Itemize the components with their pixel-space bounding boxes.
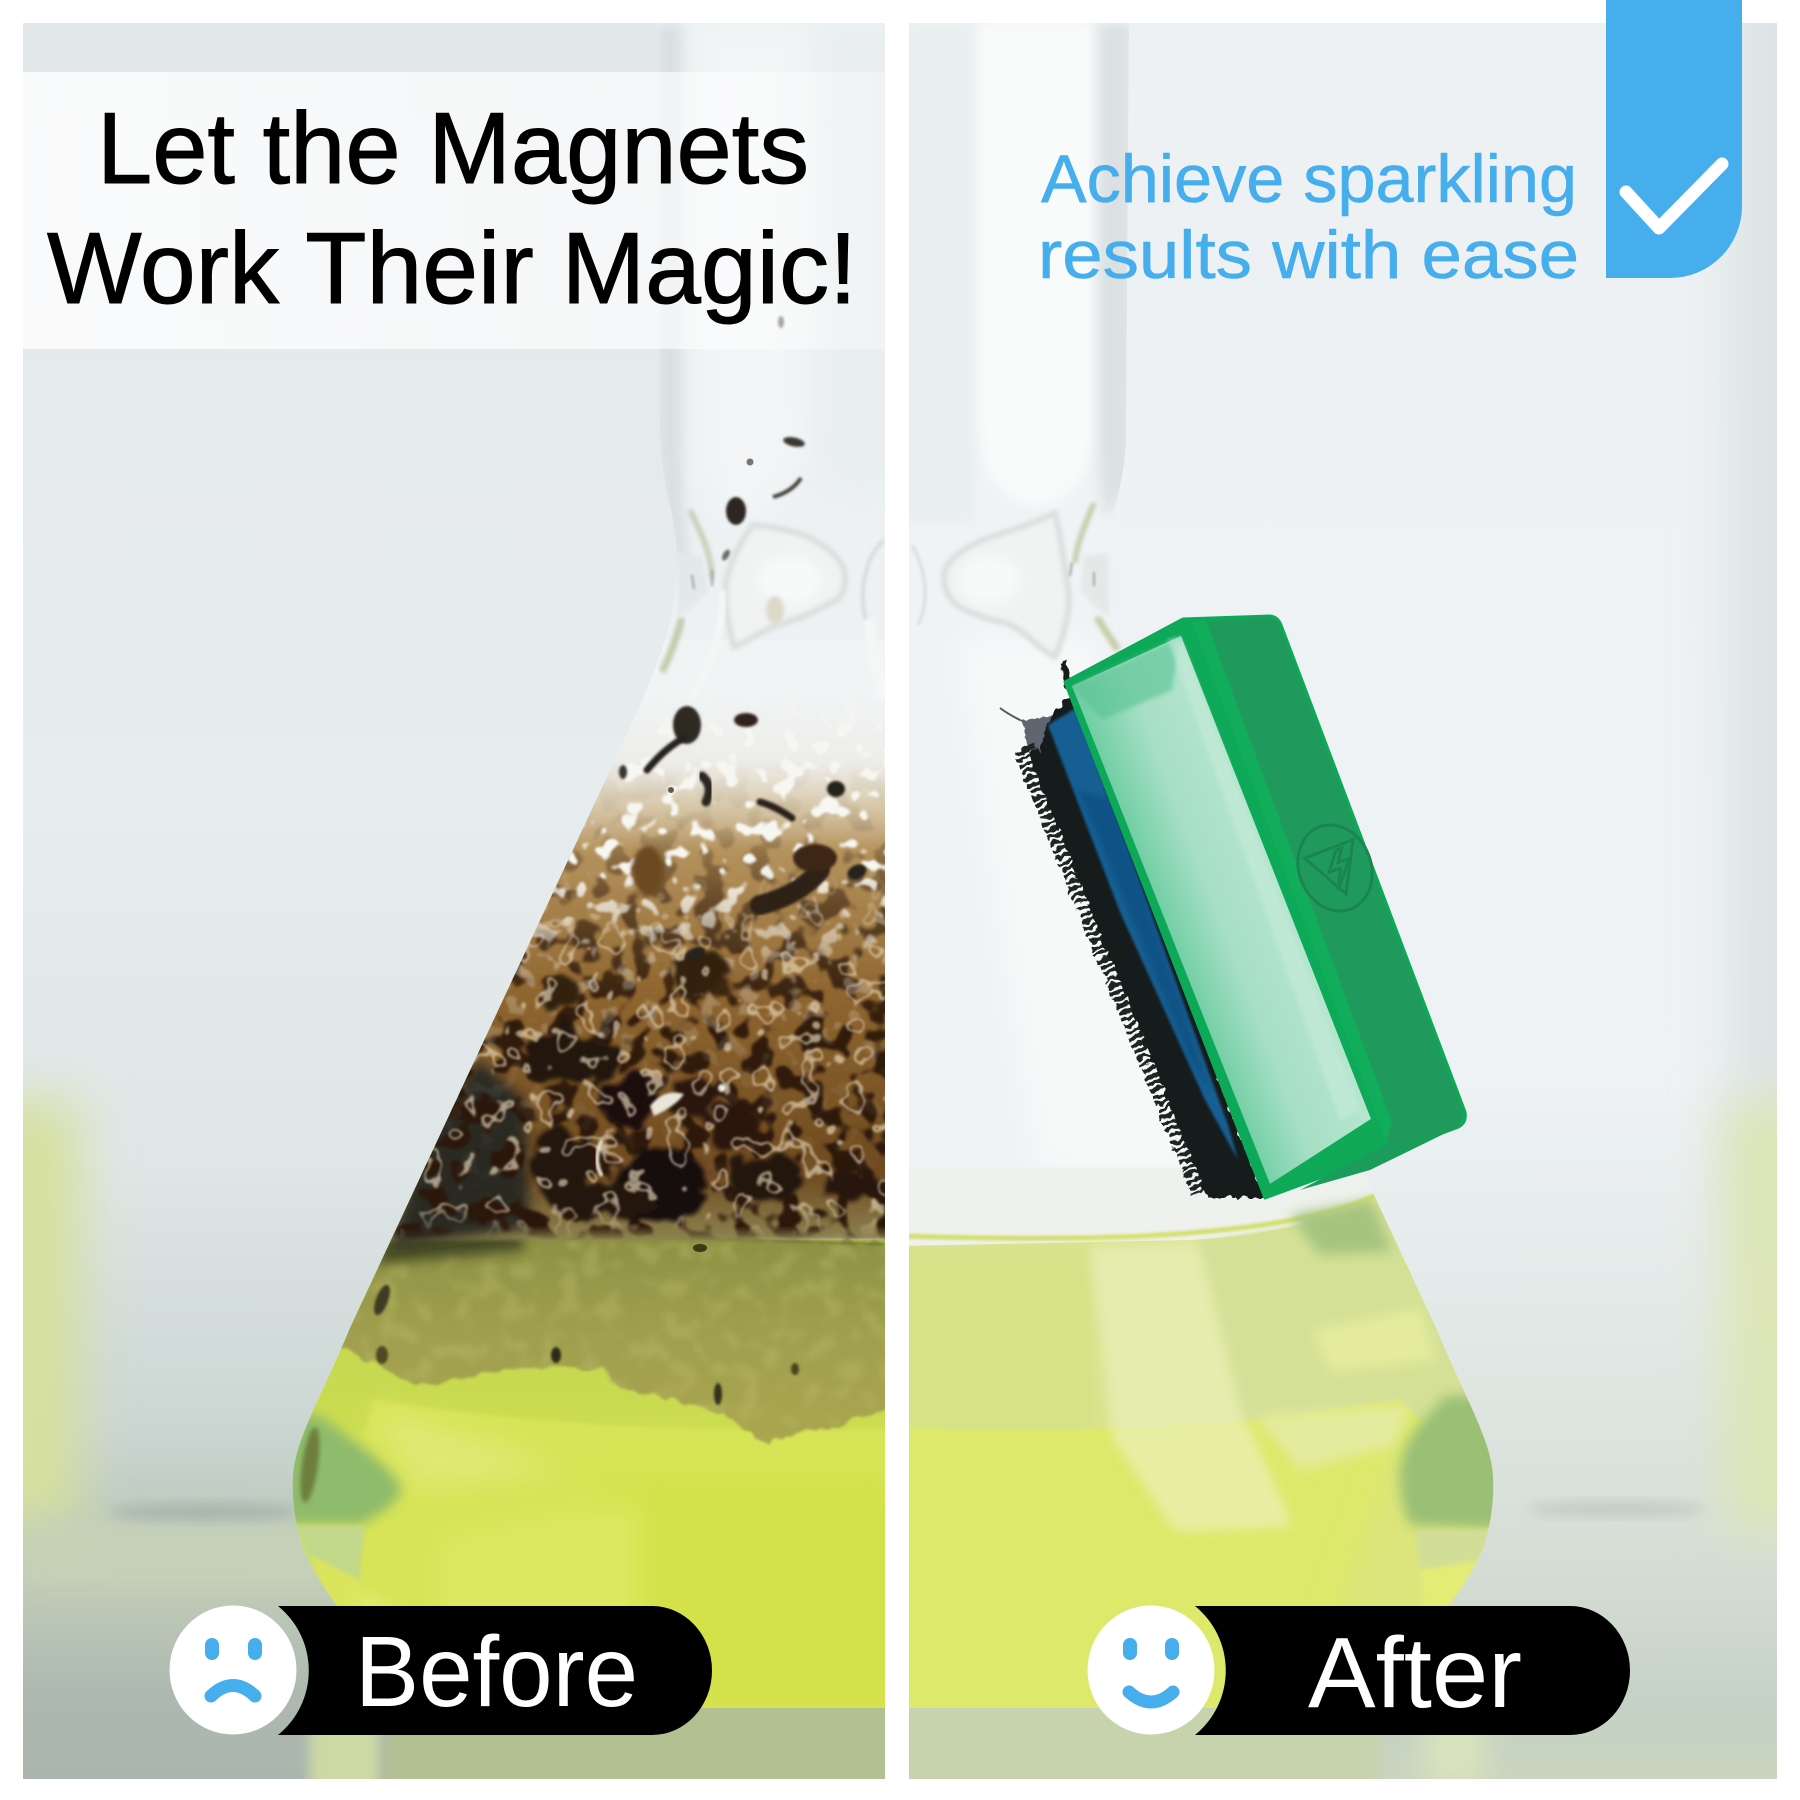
callout text: achieve sparkling results [1038, 141, 1579, 293]
after label text: After [1308, 1617, 1522, 1729]
icon: happy face [1088, 1606, 1214, 1734]
icon: blue ribbon tab with check mark [1606, 0, 1742, 278]
felt pad [1022, 660, 1264, 1198]
label: before pill [278, 1606, 712, 1735]
label: after pill [1195, 1606, 1630, 1735]
flask: yellow liquid [280, 1240, 900, 1710]
title text [47, 93, 857, 325]
flask: glass neck and body [974, 24, 1192, 1166]
title text: Work Their Magic! [47, 213, 857, 325]
title text: Let the Magnets [97, 93, 809, 205]
icon: glass neck bulb [658, 508, 885, 675]
icon: glass neck bulb [912, 503, 1118, 657]
before label text: Before [355, 1616, 638, 1728]
flask: empty glass neck and body [294, 23, 885, 1605]
brown dirt mass [388, 734, 885, 1249]
logo embossed on case side [1296, 824, 1374, 912]
title banner [23, 72, 885, 349]
flask: yellow liquid [900, 1192, 1520, 1720]
icon: sad face [170, 1606, 296, 1734]
blue foam [1048, 708, 1238, 1160]
magnet scrubber [1000, 616, 1465, 1198]
callout text: achieve sparkling results: results with ease [1038, 217, 1579, 293]
green plastic case [1065, 616, 1465, 1198]
large dark flecks [371, 706, 869, 1405]
panel: before photo [0, 23, 925, 1790]
panel: after photo [890, 0, 1800, 1794]
flask rim above the liquid [1022, 1169, 1202, 1192]
illustration: grime on the flask wall [341, 704, 885, 1446]
olive residue band [341, 1230, 885, 1446]
specks in the flask neck [668, 316, 806, 793]
callout text: achieve sparkling results: Achieve sparkling [1041, 141, 1577, 217]
